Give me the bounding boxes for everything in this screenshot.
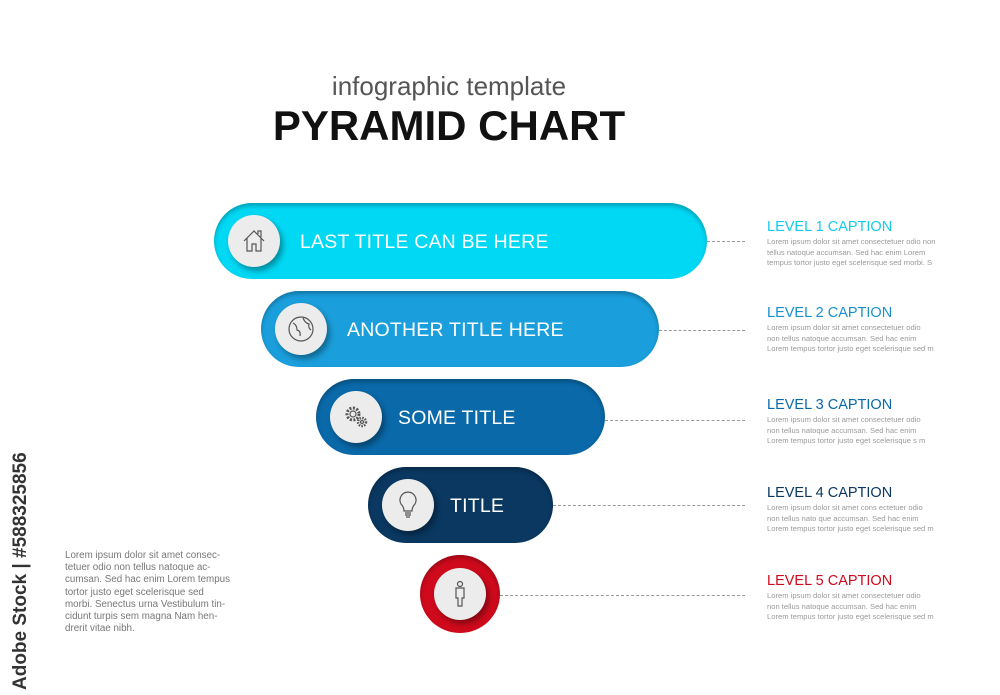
caption 3: Lorem ipsum dolor sit amet consectetuer odio	[767, 415, 921, 424]
caption 1: LEVEL 1 CAPTION	[767, 219, 892, 235]
caption 5	[767, 573, 934, 621]
caption 1: tellus natoque accumsan. Sed hac enim Lorem	[767, 248, 925, 256]
level 5 red circle	[420, 555, 500, 633]
caption 4: LEVEL 4 CAPTION	[767, 485, 892, 501]
bar 2	[261, 291, 659, 367]
caption 4: Lorem ipsum dolor sit amet cons ectetuer odio	[767, 503, 923, 512]
icon: bulb	[382, 479, 434, 531]
caption 5: Lorem ipsum dolor sit amet consectetuer odio	[767, 591, 921, 600]
caption 2: LEVEL 2 CAPTION	[767, 305, 892, 321]
connector lines	[707, 241, 745, 242]
bar 3	[316, 379, 605, 455]
caption 1	[767, 219, 935, 267]
watermark vertical text: Adobe Stock | #588325856	[10, 452, 31, 690]
caption 3	[767, 397, 925, 445]
caption 5: non tellus natoque accumsan. Sed hac enim	[767, 602, 916, 610]
bar 2 label: ANOTHER TITLE HERE	[347, 319, 564, 341]
caption 5: LEVEL 5 CAPTION	[767, 573, 892, 589]
left text block: tetuer odio non tellus natoque ac-	[65, 562, 210, 573]
left text block: drerit vitae nibh.	[65, 623, 135, 634]
icon: gears	[330, 391, 382, 443]
caption 5: Lorem tempus tortor justo eget scelerisque sed m	[767, 612, 934, 621]
caption 3: LEVEL 3 CAPTION	[767, 397, 892, 413]
icon: house	[228, 215, 280, 267]
left text block: cumsan. Sed hac enim Lorem tempus	[65, 574, 230, 585]
left text block: morbi. Senectus urna Vestibulum tin-	[65, 599, 225, 610]
bar 1	[214, 203, 707, 279]
bar 3 label: SOME TITLE	[398, 407, 516, 429]
left text block: tortor justo eget scelerisque sed	[65, 587, 204, 598]
left text block: Lorem ipsum dolor sit amet consec-	[65, 550, 220, 561]
caption 3: Lorem tempus tortor justo eget scelerisque s m	[767, 436, 925, 445]
bar 4	[368, 467, 553, 543]
caption 3: non tellus natoque accumsan. Sed hac enim	[767, 426, 916, 434]
caption 4	[767, 485, 934, 533]
caption 2: Lorem ipsum dolor sit amet consectetuer odio	[767, 323, 921, 332]
caption 4: non tellus nato que accumsan. Sed hac enim	[767, 514, 919, 522]
caption 1: Lorem ipsum dolor sit amet consectetuer odio non	[767, 237, 935, 246]
bar 1 label: LAST TITLE CAN BE HERE	[300, 231, 549, 253]
caption 4: Lorem tempus tortor justo eget scelerisque sed m	[767, 524, 934, 533]
bar 4 label: TITLE	[450, 495, 504, 517]
left text block	[65, 550, 230, 634]
caption 2: Lorem tempus tortor justo eget scelerisque sed m	[767, 344, 934, 353]
icon: globe	[275, 303, 327, 355]
icon: person	[434, 568, 486, 620]
subtitle: infographic template	[332, 71, 566, 101]
left text block: cidunt turpis sem magna Nam hen-	[65, 611, 217, 622]
title: PYRAMID CHART	[273, 102, 625, 149]
caption 2	[767, 305, 934, 353]
caption 2: non tellus natoque accumsan. Sed hac enim	[767, 334, 916, 342]
caption 1: tempus tortor justo eget scelerisque sed morbi. S	[767, 258, 932, 267]
